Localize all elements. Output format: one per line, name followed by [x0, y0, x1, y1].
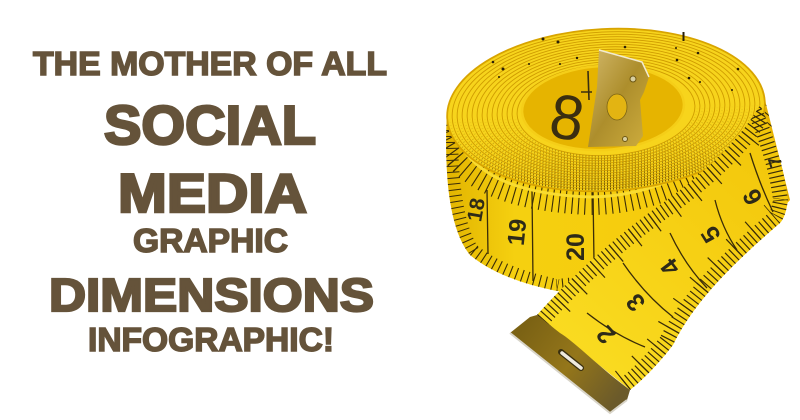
strip numbers 2 to 7: 5 — [696, 221, 727, 248]
coil numbers 18, 19, 20: 19 — [503, 218, 532, 247]
coil numbers 18, 19, 20: 18 — [463, 196, 490, 223]
right edge major ticks — [630, 223, 780, 390]
coil numbers 18, 19, 20: 20 — [562, 233, 590, 261]
title line: GRAPHIC: GRAPHIC — [133, 222, 288, 259]
coil side wall with cm marks — [446, 100, 790, 300]
tongue hole — [607, 94, 627, 120]
inner cm mark — [581, 71, 592, 100]
metal tongue at the tape end in centre of coil — [588, 50, 649, 147]
title line: INFOGRAPHIC!: INFOGRAPHIC! — [88, 321, 334, 358]
tip slot — [561, 352, 581, 368]
centimetre lines — [587, 153, 773, 347]
title text block — [33, 45, 387, 358]
left edge ticks — [537, 105, 760, 315]
strip numbers 2 to 7: 6 — [737, 184, 769, 209]
title line: DIMENSIONS: DIMENSIONS — [49, 269, 374, 321]
illustration: rolled yellow measuring tape — [443, 21, 790, 413]
strip numbers 2 to 7: 3 — [621, 288, 651, 316]
strip numbers 2 to 7: 7 — [764, 154, 786, 170]
title line: SOCIAL: SOCIAL — [104, 94, 316, 156]
title line: THE MOTHER OF ALL: THE MOTHER OF ALL — [33, 45, 387, 82]
strip numbers 2 to 7: 4 — [655, 253, 686, 281]
centre hole of the coil — [520, 62, 686, 156]
title line: MEDIA: MEDIA — [118, 162, 307, 224]
coil numbers 18, 19, 20 — [463, 196, 590, 261]
uncoiling tape strip — [537, 105, 788, 390]
coil top surface: concentric wound rings — [443, 21, 769, 199]
strip numbers 2 to 7: 2 — [591, 320, 621, 349]
right edge ticks — [630, 105, 788, 390]
metal tip of the tape — [510, 315, 630, 413]
scattered black tick dots on rings — [492, 32, 739, 91]
tongue rivets — [630, 76, 636, 82]
inner number 8: 8 — [545, 81, 588, 156]
left edge major ticks — [537, 105, 760, 315]
strip numbers 2 to 7 — [591, 154, 786, 349]
